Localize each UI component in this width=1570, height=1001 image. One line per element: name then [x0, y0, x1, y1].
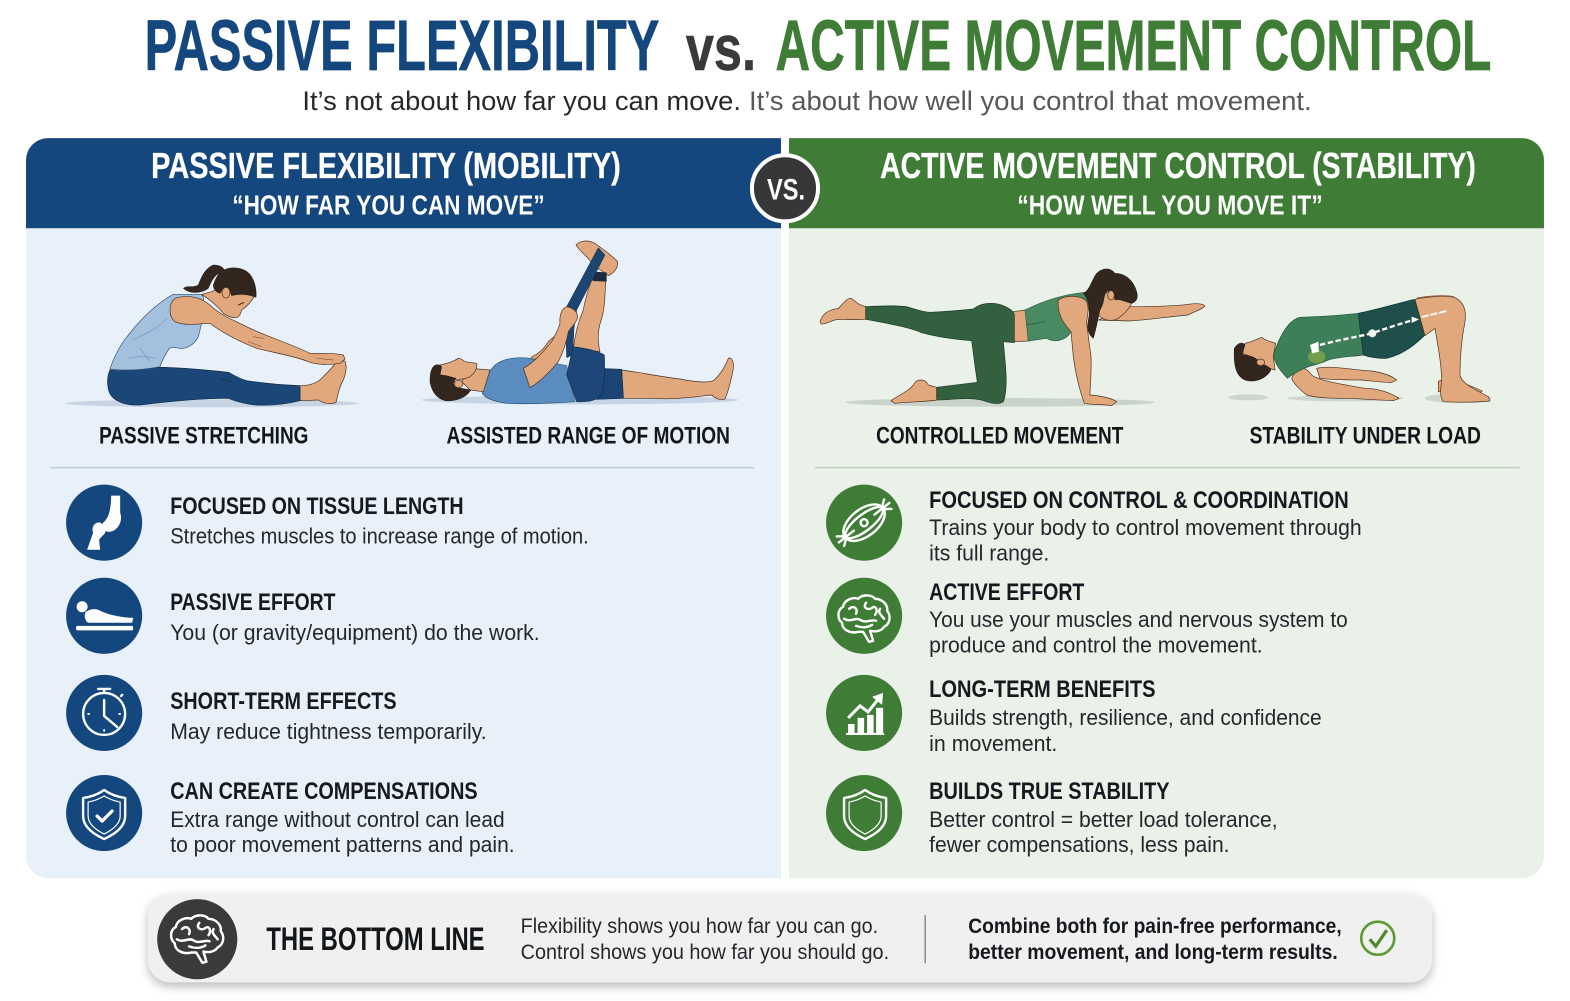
icon: shield: [826, 775, 902, 851]
banner conclusion: Combine both for pain-free performance,: [968, 915, 1342, 938]
text: BUILDS TRUE STABILITY: [929, 778, 1169, 805]
text: [929, 579, 1348, 657]
icon: joint: [66, 485, 142, 561]
text: its full range.: [929, 541, 1049, 566]
title: [145, 7, 1491, 86]
title: PASSIVE FLEXIBILITY: [145, 7, 659, 86]
icon: muscle: [826, 485, 902, 561]
text: PASSIVE EFFORT: [170, 589, 336, 616]
illustration: bird dog: [820, 269, 1205, 407]
item: passive effort: [66, 578, 540, 654]
panel background: [26, 228, 781, 878]
item: focused on control and coordination: [826, 485, 1362, 566]
banner message: [521, 915, 889, 964]
text: ACTIVE EFFORT: [929, 579, 1085, 606]
text: May reduce tightness temporarily.: [170, 719, 487, 744]
panel header: “HOW WELL YOU MOVE IT”: [1017, 189, 1323, 220]
text: [170, 589, 540, 645]
text: Builds strength, resilience, and confidence: [929, 705, 1322, 730]
icon: check mark: [1361, 922, 1394, 955]
caption: stability under load: STABILITY UNDER LOAD: [1250, 423, 1481, 450]
text: SHORT-TERM EFFECTS: [170, 688, 397, 715]
text: CAN CREATE COMPENSATIONS: [170, 778, 478, 805]
text: You (or gravity/equipment) do the work.: [170, 620, 540, 645]
vs badge: [752, 155, 818, 221]
icon: shield with check: [66, 775, 142, 851]
item: short-term effects: [66, 675, 487, 751]
text: FOCUSED ON TISSUE LENGTH: [170, 493, 464, 520]
panel header: [789, 138, 1544, 228]
item: active effort: [826, 578, 1348, 657]
text: [929, 487, 1362, 566]
text: in movement.: [929, 731, 1057, 756]
text: LONG-TERM BENEFITS: [929, 676, 1155, 703]
subtitle: It’s about how well you control that movement.: [749, 86, 1312, 116]
title: vs.: [686, 12, 756, 84]
text: Extra range without control can lead: [170, 807, 505, 832]
item: long-term benefits: [826, 675, 1322, 756]
panel header: PASSIVE FLEXIBILITY (MOBILITY): [151, 145, 621, 186]
text: to poor movement patterns and pain.: [170, 832, 515, 857]
vs badge: VS.: [767, 173, 805, 206]
text: [929, 676, 1322, 756]
illustration: glute bridge: [1228, 296, 1492, 403]
text: produce and control the movement.: [929, 632, 1263, 657]
text: Trains your body to control movement through: [929, 515, 1362, 540]
banner message: Control shows you how far you should go.: [521, 941, 889, 964]
icon: stopwatch: [66, 675, 142, 751]
caption: assisted range of motion: ASSISTED RANGE OF MOTION: [447, 423, 730, 450]
text: [170, 493, 589, 549]
banner background: [148, 894, 1432, 982]
banner message: Flexibility shows you how far you can go.: [521, 915, 878, 938]
text: fewer compensations, less pain.: [929, 832, 1230, 857]
text: [929, 778, 1278, 857]
text: Stretches muscles to increase range of motion.: [170, 524, 589, 549]
icon: brain: [157, 899, 237, 979]
panel header: [26, 138, 781, 228]
caption: passive stretching: PASSIVE STRETCHING: [99, 423, 308, 450]
caption: controlled movement: CONTROLLED MOVEMENT: [876, 423, 1124, 450]
text: [170, 778, 515, 857]
bottom line banner: [148, 894, 1432, 982]
subtitle: It’s not about how far you can move.: [302, 86, 741, 116]
illustration: assisted strap stretch: [422, 241, 738, 404]
item: builds true stability: [826, 775, 1278, 857]
panel: active movement control: [789, 138, 1544, 878]
icon: person lying down: [66, 578, 142, 654]
text: Better control = better load tolerance,: [929, 807, 1278, 832]
illustration: seated forward stretch: [65, 265, 358, 407]
icon: rising chart: [826, 675, 902, 751]
icon: brain: [826, 578, 902, 654]
banner conclusion: better movement, and long-term results.: [968, 941, 1338, 964]
text: [170, 688, 487, 744]
text: You use your muscles and nervous system to: [929, 607, 1348, 632]
subtitle: [302, 86, 1312, 116]
panel: passive flexibility: [26, 138, 781, 878]
item: can create compensations: [66, 775, 515, 857]
text: FOCUSED ON CONTROL & COORDINATION: [929, 487, 1349, 514]
banner heading: THE BOTTOM LINE: [266, 921, 485, 957]
panel background: [789, 228, 1544, 878]
panel header: “HOW FAR YOU CAN MOVE”: [232, 189, 545, 220]
item: focused on tissue length: [66, 485, 589, 561]
banner conclusion: [968, 915, 1342, 964]
